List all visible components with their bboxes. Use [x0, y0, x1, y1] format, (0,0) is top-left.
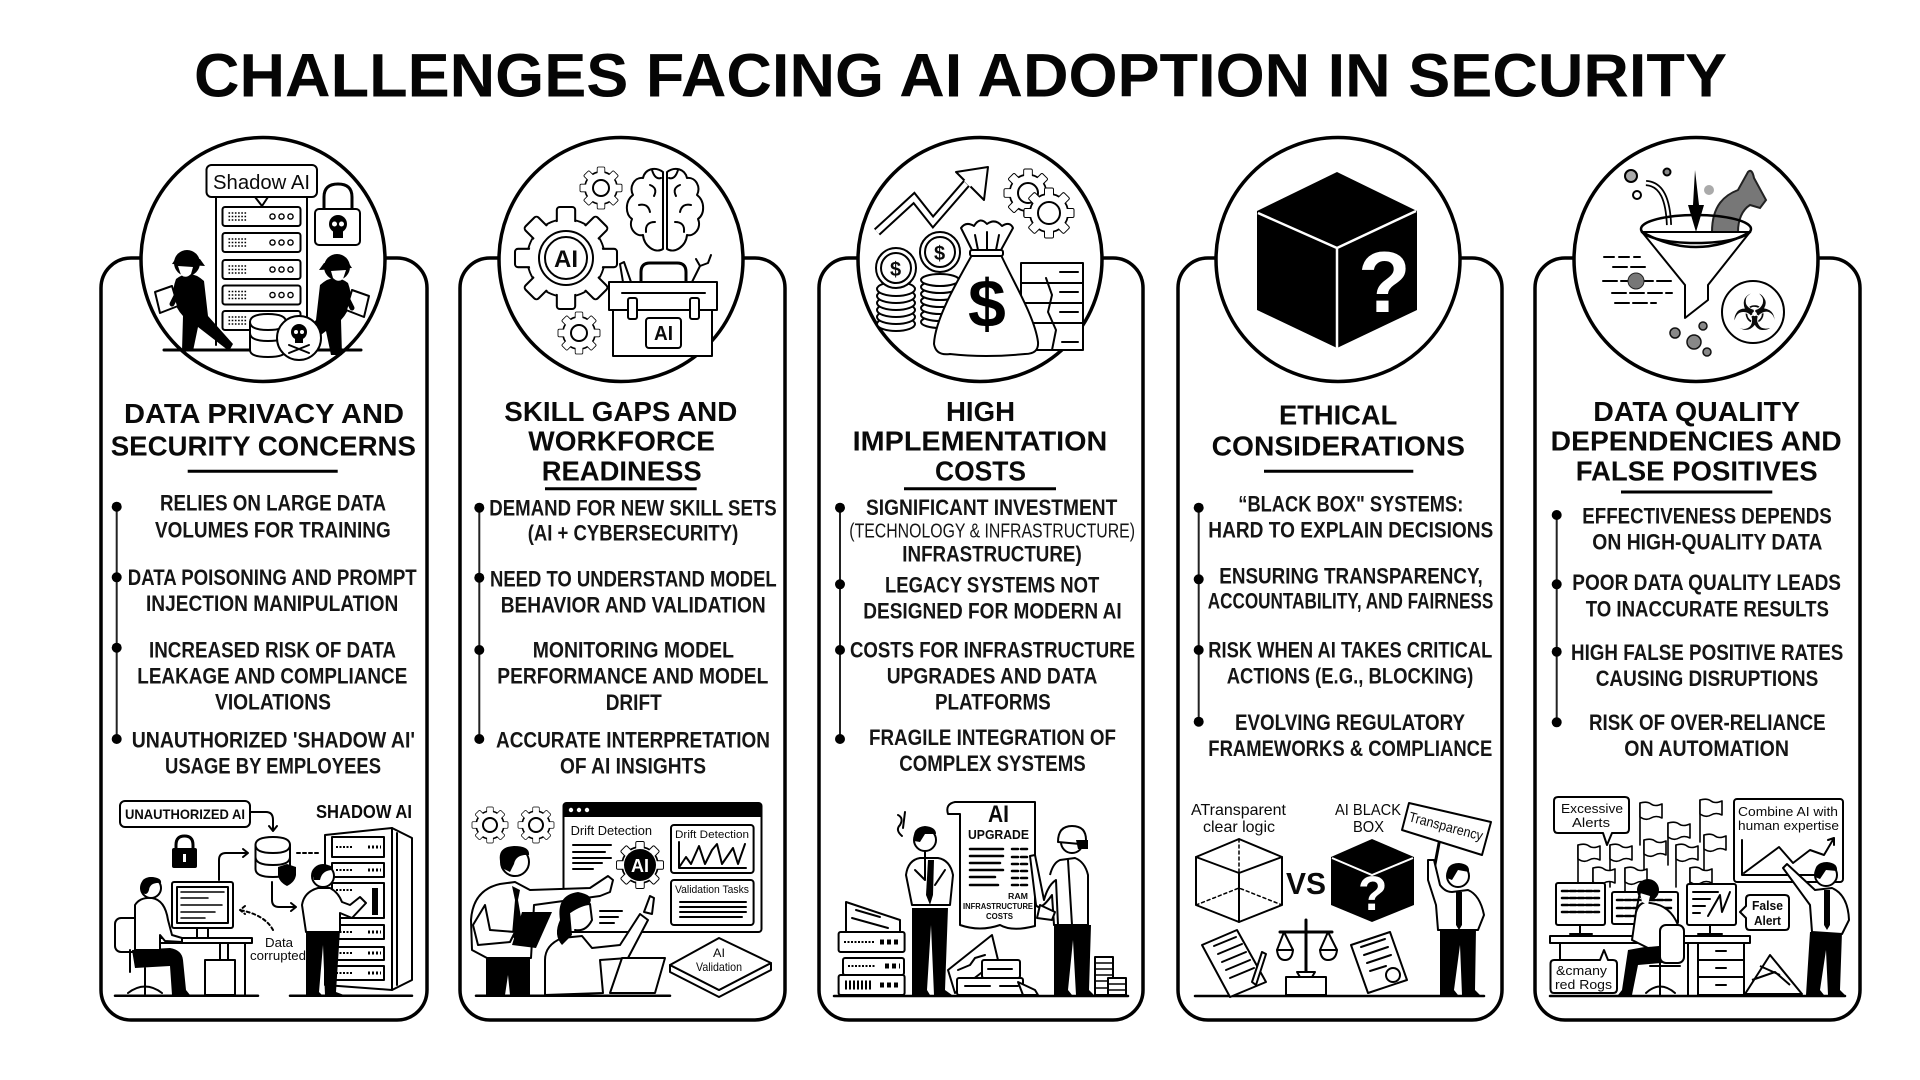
toolbox [609, 255, 717, 356]
bullet text: critical actions: RISK WHEN AI TAKES CRITICAL [1208, 638, 1492, 663]
bullet text: shadow AI: UNAUTHORIZED 'SHADOW AI' [132, 727, 415, 752]
heading: ETHICAL [1279, 399, 1397, 430]
bullet text: AI insights [496, 728, 770, 778]
excessive alerts bubble: Excessive [1561, 801, 1623, 816]
AI upgrade scroll: AI [988, 801, 1009, 828]
bullet text: regulatory frameworks: EVOLVING REGULATORY [1235, 710, 1465, 735]
rising arrow [877, 167, 988, 232]
icon: money bag and coins circle [858, 138, 1102, 382]
excessive alerts bubble [1554, 797, 1629, 845]
bullet text: fragile integration: FRAGILE INTEGRATION OF [869, 725, 1116, 750]
bullet timeline [1552, 510, 1562, 727]
red flags [1578, 799, 1726, 910]
bullet text: model behavior [490, 567, 777, 618]
bullet text: poor quality [1572, 570, 1841, 622]
expert pointing at chart [1783, 862, 1849, 995]
analyst with head in hands [1618, 879, 1684, 995]
icon: funnel and biohazard circle [1574, 138, 1818, 382]
AI upgrade scroll: COSTS [986, 912, 1014, 921]
biohazard badge: ☣ [1732, 284, 1777, 342]
bullet text: black box [1208, 492, 1493, 542]
bullet text: regulatory frameworks [1208, 710, 1492, 761]
heading: READINESS [542, 456, 702, 487]
heading: SECURITY CONCERNS [111, 431, 416, 462]
icon: shadow AI circle [141, 138, 385, 382]
bullet text: model drift: MONITORING MODEL [533, 638, 734, 663]
bullet text: fragile integration [869, 725, 1116, 776]
heading: DATA PRIVACY AND [124, 398, 404, 429]
seated woman pointing [545, 892, 654, 995]
heading: IMPLEMENTATION [853, 426, 1107, 457]
heading: FALSE POSITIVES [1576, 456, 1818, 487]
AI validation book: AI [713, 946, 725, 960]
heading: SKILL GAPS AND [504, 396, 737, 427]
left document [1202, 930, 1266, 997]
illustration: unauthorized AI and shadow AI rack: UNAUTHORIZED AI [125, 806, 245, 822]
bullet text: critical actions [1208, 638, 1492, 688]
panel: high implementation costs [819, 138, 1143, 1020]
combine AI box: human expertise [1738, 818, 1839, 833]
black box label: BOX [1353, 819, 1384, 836]
many red flags note: red Rogs [1555, 977, 1613, 992]
illustration: unauthorized AI and shadow AI rack [115, 801, 412, 996]
bullet text: infrastructure upgrades [850, 638, 1135, 714]
bullet text: poisoning: INJECTION MANIPULATION [146, 591, 398, 616]
bullet text: new skill sets: DEMAND FOR NEW SKILL SETS [489, 496, 777, 521]
bullet text: black box: HARD TO EXPLAIN DECISIONS [1208, 517, 1493, 542]
bullet text: black box: “BLACK BOX" SYSTEMS: [1238, 492, 1463, 517]
false alert bubble: Alert [1754, 913, 1782, 928]
black box label: AI BLACK [1335, 802, 1401, 819]
bullet text: transparency [1208, 563, 1493, 613]
bullet text: leakage: VIOLATIONS [215, 689, 331, 714]
panel: ethical considerations [1178, 138, 1502, 1020]
AI validation book [670, 938, 771, 997]
combine AI box [1734, 799, 1843, 882]
bullet timeline [1194, 503, 1204, 727]
false alert bubble [1740, 895, 1789, 930]
money bag: $ [968, 266, 1006, 342]
transparency sign [1402, 803, 1491, 880]
AI upgrade scroll: INFRASTRUCTURE [963, 902, 1034, 911]
bullet text: leakage: INCREASED RISK OF DATA [149, 637, 396, 662]
illustration: unauthorized AI and shadow AI rack: SHADOW AI [316, 802, 412, 822]
many red flags note: &cmany [1556, 963, 1608, 978]
bullet text: over-reliance [1589, 710, 1826, 761]
bullet text: poor quality: TO INACCURATE RESULTS [1586, 597, 1829, 622]
bullet text: investment [849, 495, 1135, 567]
bullet text: false positives: HIGH FALSE POSITIVE RATES [1571, 640, 1843, 665]
illustration: unauthorized AI and shadow AI rack: Data [265, 935, 294, 950]
toolbox: AI [654, 323, 673, 345]
many red flags note [1550, 950, 1617, 993]
transparent label: clear logic [1203, 819, 1275, 836]
false alert bubble: False [1752, 898, 1783, 913]
bullet text: legacy systems: DESIGNED FOR MODERN AI [863, 598, 1122, 623]
bullet text: infrastructure upgrades: COSTS FOR INFRASTRUCTURE [850, 638, 1135, 663]
bullet text: fragile integration: COMPLEX SYSTEMS [899, 751, 1086, 776]
bullet text: data volumes [155, 491, 391, 542]
bullet text: over-reliance: ON AUTOMATION [1624, 736, 1789, 761]
right document [1351, 932, 1407, 993]
heading [504, 396, 737, 487]
bullet text: false positives: CAUSING DISRUPTIONS [1596, 666, 1818, 691]
panel frame [819, 258, 1143, 1020]
VS label: VS [1286, 866, 1326, 901]
bullet text: false positives [1571, 640, 1843, 691]
dashboard window: Validation Tasks [675, 884, 749, 896]
transparent label [1191, 802, 1287, 836]
server stack [839, 902, 905, 995]
icon: gears brain and toolbox circle: AI [554, 246, 578, 273]
black cube [1331, 839, 1414, 922]
bullet text: regulatory frameworks: FRAMEWORKS & COMPLIANCE [1208, 736, 1492, 761]
AI upgrade scroll: RAM [1008, 892, 1028, 901]
bullet text: high quality data: ON HIGH-QUALITY DATA [1592, 529, 1822, 554]
bullet text: high quality data: EFFECTIVENESS DEPENDS [1582, 503, 1832, 528]
server rack [325, 828, 412, 990]
engineer with hard hat [1030, 826, 1094, 995]
panel frame [460, 258, 785, 1020]
bullet text: model drift: DRIFT [606, 690, 662, 715]
funnel [1641, 215, 1751, 318]
icon: black box cube circle: ? [1358, 235, 1411, 331]
streams entering funnel [1625, 168, 1766, 232]
bullet text: new skill sets: (AI + CYBERSECURITY) [528, 521, 738, 546]
illustration: unauthorized AI and shadow AI rack: corrupted [250, 948, 306, 963]
bullet text: over-reliance: RISK OF OVER-RELIANCE [1589, 710, 1826, 735]
bullet text: legacy systems: LEGACY SYSTEMS NOT [885, 572, 1100, 597]
bullet text: infrastructure upgrades: UPGRADES AND DATA [887, 663, 1097, 688]
AI validation book: Validation [696, 960, 742, 974]
heading: WORKFORCE [528, 426, 715, 457]
monitors on desk [1550, 883, 1750, 995]
icon: money bag and coins circle: $ [934, 243, 945, 265]
dashboard window [564, 803, 762, 932]
money bag [934, 220, 1038, 356]
dashboard window: Drift Detection [675, 829, 749, 841]
bullet timeline [474, 503, 484, 744]
cracked server [1021, 263, 1083, 350]
heading: DATA QUALITY [1593, 396, 1800, 427]
combine AI box: Combine AI with [1738, 804, 1838, 819]
heading: COSTS [935, 456, 1026, 487]
icon: black box cube circle [1216, 138, 1460, 382]
bullet text: poisoning: DATA POISONING AND PROMPT [128, 565, 417, 590]
panel frame [101, 258, 427, 1020]
bullet text: investment: (TECHNOLOGY & INFRASTRUCTURE) [849, 521, 1135, 543]
bullet text: transparency: ENSURING TRANSPARENCY, [1219, 563, 1483, 588]
bullet text: shadow AI [132, 727, 415, 778]
panel frame [1178, 258, 1502, 1020]
bullet text: data volumes: VOLUMES FOR TRAINING [155, 517, 391, 542]
man with sign [1428, 860, 1484, 995]
black box label [1335, 802, 1401, 836]
illustration: team reviewing drift detection dashboard [471, 803, 771, 997]
standing worker [302, 865, 366, 995]
transparency sign: Transparency [1407, 808, 1485, 844]
panel: skill gaps and workforce readiness [460, 138, 785, 1020]
panel frame [1535, 258, 1860, 1020]
bullet text: poisoning [128, 565, 417, 616]
bullet text: investment: INFRASTRUCTURE) [902, 542, 1082, 567]
illustration: alert overload analyst and expert [1550, 797, 1849, 996]
bullet text: poor quality: POOR DATA QUALITY LEADS [1572, 570, 1841, 595]
bullet text: investment: SIGNIFICANT INVESTMENT [866, 495, 1118, 520]
dirty data lines [1603, 257, 1672, 303]
icon: shadow AI circle: Shadow AI [213, 172, 310, 194]
dashboard window: Drift Detection [571, 823, 652, 838]
bullet text: critical actions: ACTIONS (E.G., BLOCKING) [1227, 663, 1473, 688]
bullet text: model behavior: NEED TO UNDERSTAND MODEL [490, 567, 777, 592]
bullet text: model behavior: BEHAVIOR AND VALIDATION [501, 593, 766, 618]
bullet text: leakage [137, 637, 407, 714]
bullet timeline [835, 503, 845, 744]
worried man [898, 812, 953, 995]
heading: DEPENDENCIES AND [1551, 426, 1842, 457]
transparent cube [1196, 839, 1282, 922]
dashboard window: AI [631, 856, 649, 876]
icon: gears brain and toolbox circle [499, 138, 743, 382]
scales of justice [1277, 920, 1337, 995]
icon: money bag and coins circle: $ [890, 259, 901, 281]
heading: CONSIDERATIONS [1212, 431, 1465, 462]
paper pile [1745, 955, 1802, 994]
bullet text: infrastructure upgrades: PLATFORMS [935, 689, 1051, 714]
heading [853, 396, 1107, 487]
bullet text: transparency: ACCOUNTABILITY, AND FAIRNESS [1208, 588, 1493, 613]
bullet text: model drift: PERFORMANCE AND MODEL [497, 663, 768, 688]
coin stacks [876, 232, 960, 331]
heading: HIGH [946, 396, 1015, 427]
illustration: AI upgrade cost document [834, 801, 1128, 996]
AI upgrade scroll: UPGRADE [968, 827, 1029, 842]
bullet text: model drift [497, 638, 768, 715]
small servers and coins [948, 935, 1126, 995]
panel: data privacy and security concerns [101, 138, 427, 1020]
standing man pointing [471, 846, 613, 995]
panel: data quality dependencies and false positives [1535, 138, 1860, 1020]
heading [111, 398, 416, 462]
droplets [1670, 322, 1711, 356]
heading [1212, 399, 1465, 462]
transparent label: ATransparent [1191, 802, 1287, 819]
bullet text: leakage: LEAKAGE AND COMPLIANCE [137, 663, 407, 688]
bullet text: AI insights: OF AI INSIGHTS [560, 753, 706, 778]
bullet text: new skill sets [489, 496, 777, 546]
seated worker and desk [115, 877, 252, 995]
laptop [610, 958, 665, 993]
heading [1551, 396, 1842, 487]
bullet text: high quality data [1582, 503, 1832, 554]
excessive alerts bubble: Alerts [1572, 815, 1611, 830]
bullet text: legacy systems [863, 572, 1122, 623]
black cube: ? [1358, 868, 1387, 921]
bullet text: AI insights: ACCURATE INTERPRETATION [496, 728, 770, 753]
AI upgrade scroll [947, 801, 1035, 929]
title: CHALLENGES FACING AI ADOPTION IN SECURITY [194, 42, 1727, 110]
brain [627, 169, 703, 251]
biohazard badge [1722, 281, 1784, 343]
bullet text: data volumes: RELIES ON LARGE DATA [160, 491, 386, 516]
illustration: transparent versus black box [1191, 802, 1491, 997]
bullet text: shadow AI: USAGE BY EMPLOYEES [165, 753, 381, 778]
bullet timeline [112, 502, 122, 744]
